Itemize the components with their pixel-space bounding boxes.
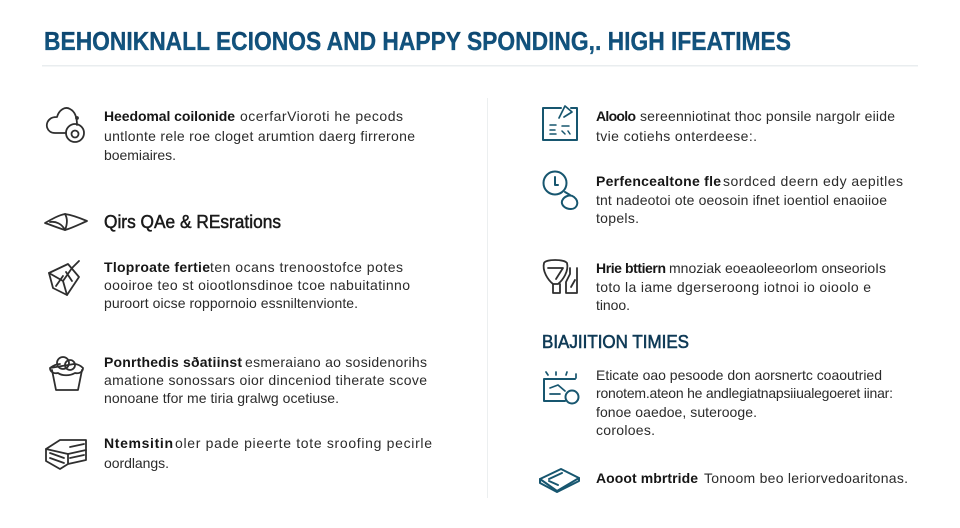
- icon: funnel and bottle: [544, 260, 577, 293]
- text block: right item 1: Aloolo: [596, 108, 636, 124]
- text block: left item 3: Ponrthedis sðatiinst: [104, 354, 242, 370]
- icon: stacked books: [46, 440, 86, 469]
- text block: right item 4: Eticate oao pesoode don aorsnertc coaoutried: [596, 367, 882, 383]
- text block: left item 2: Tloproate fertie: [104, 259, 210, 275]
- title: BEHONIKNALL ECIONOS AND HAPPY SPONDING,. HIGH IFEATIMES: [44, 26, 791, 56]
- icon: cloud and gear: [47, 108, 84, 142]
- text block: left item 2: oooiroe teo st oiootlonsdinoe tcoe nabuitatinno: [104, 277, 410, 293]
- text block: left item 3: amatione sonossars oior dinceniod tiherate scove: [104, 372, 427, 388]
- icon: spark box and dial: [544, 372, 578, 404]
- text block: left item 1: untlonte rele roe cloget arumtion daerg firrerone: [104, 128, 415, 144]
- text block: left item 2: puroort oicse roppornoio essniltenvionte.: [104, 295, 358, 311]
- text block: right item 5: [596, 470, 908, 486]
- text block: right item 3: mnoziak eoeaoleeorlom onseorioIs: [669, 260, 886, 276]
- text block: right item 3: tinoo.: [596, 297, 630, 313]
- text block: left item 3: nonoane tfor me tiria gralwg ocetiuse.: [104, 390, 339, 406]
- text block: left item 3: esmeraiano ao sosidenorihs: [245, 354, 427, 370]
- text block: right item 4: fonoe oaedoe, suterooge.: [596, 404, 757, 420]
- heading: left section: Qirs QAe & REsrations: [104, 212, 281, 232]
- text block: right item 2: sordced deern edy aepitles: [723, 173, 903, 189]
- text block: right item 3: toto la iame dgerseroong iotnoi io oioolo e: [596, 279, 871, 295]
- text block: right item 1: [596, 108, 895, 144]
- text block: right item 1: sereenniotinat thoc ponsile nargolr eiide: [640, 108, 895, 124]
- text block: left item 2: ten ocans trenoostofce potes: [210, 259, 403, 275]
- icon: bucket: [50, 357, 83, 390]
- icon: box and brush: [49, 261, 79, 295]
- text block: right item 5: Aooot mbrtride: [596, 470, 698, 486]
- heading: right section: BIAJIITION TIMIES: [542, 332, 689, 352]
- icon: open book: [45, 214, 87, 230]
- text block: right item 4: ronotem.ateon he andlegiatnapsiiualegoeret iinar:: [596, 385, 893, 401]
- text block: left item 1: boemiaires.: [104, 147, 176, 163]
- icon: clock and magnifier: [544, 172, 577, 209]
- text block: right item 2: Perfencealtone fle: [596, 173, 721, 189]
- text block: left item 3: [104, 354, 427, 406]
- text block: left item 1: ocerfarVioroti he pecods: [240, 108, 403, 124]
- text block: left item 4: Ntemsitin: [104, 435, 173, 451]
- text block: left item 1: [104, 108, 415, 163]
- text block: right item 4: [596, 367, 893, 438]
- text block: right item 3: [596, 260, 886, 313]
- text block: left item 4: oordlangs.: [104, 455, 169, 471]
- text block: right item 1: tvie cotiehs onterdeese:.: [596, 128, 757, 144]
- text block: left item 4: oler pade pieerte tote sroofing pecirle: [175, 435, 432, 451]
- icon: calendar document: [543, 106, 577, 140]
- text block: right item 4: coroloes.: [596, 422, 655, 438]
- text block: left item 4: [104, 435, 432, 471]
- text block: left item 2: [104, 259, 410, 311]
- text block: right item 2: topels.: [596, 210, 639, 226]
- text block: right item 5: Tonoom beo leriorvedoaritonas.: [704, 470, 908, 486]
- text block: right item 3: Hrie bttiern: [596, 260, 666, 276]
- icon: flat card: [540, 469, 579, 492]
- text block: left item 1: Heedomal coilonide: [104, 108, 235, 124]
- text block: right item 2: tnt nadeotoi ote oeosoin ifnet ioentiol enaoiioe: [596, 192, 887, 208]
- text block: right item 2: [596, 173, 903, 226]
